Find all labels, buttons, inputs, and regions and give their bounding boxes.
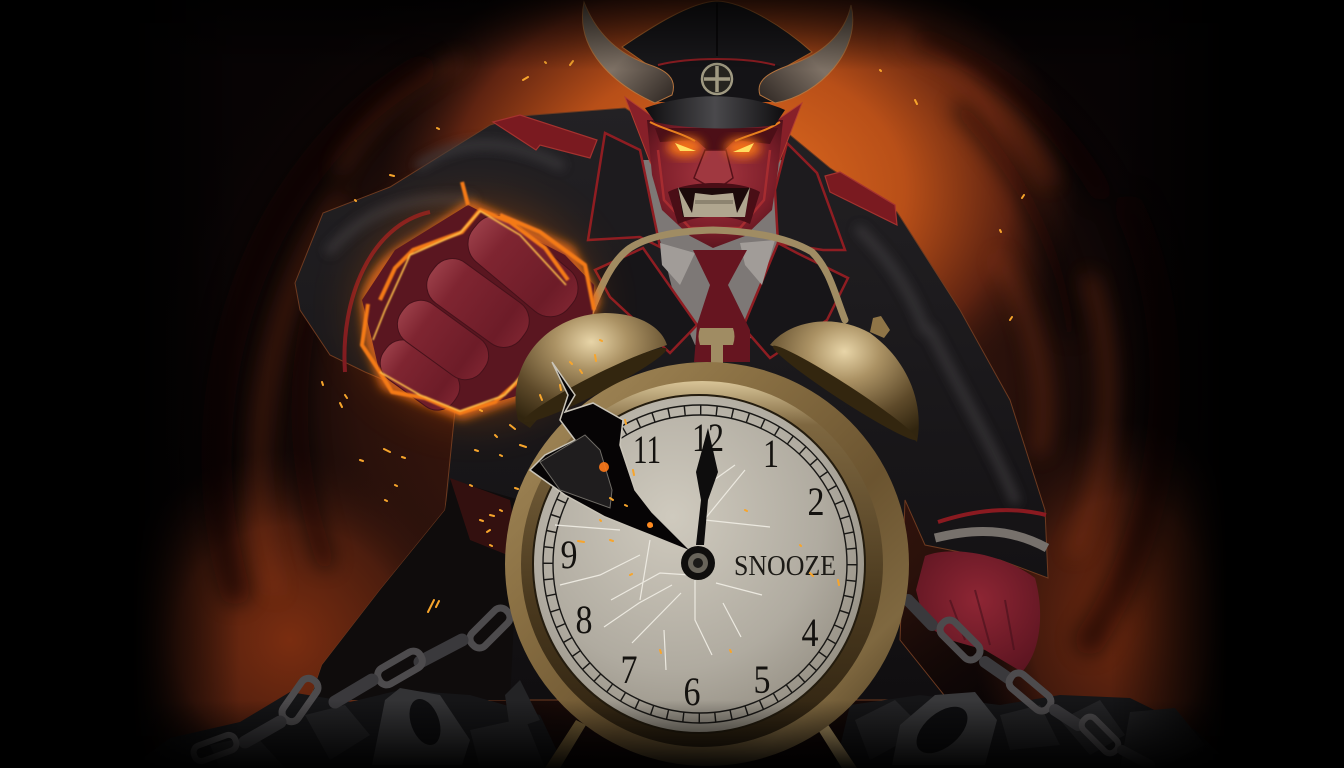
ears <box>625 97 802 190</box>
alarm clock body <box>505 362 909 766</box>
clock bell: left <box>516 313 670 429</box>
clock numerals: 7 <box>620 647 638 692</box>
demon body: black uniform jacket <box>295 108 1048 700</box>
shackle: right <box>892 692 997 765</box>
flaming fist <box>362 182 596 418</box>
chain: left <box>192 605 513 763</box>
clock numerals <box>560 415 824 714</box>
clock numerals: 1 <box>763 431 779 476</box>
glowing eyes <box>667 137 761 158</box>
horn: left <box>582 2 673 103</box>
clock numerals: 8 <box>576 597 592 642</box>
chain: right <box>908 600 1150 765</box>
broken shard <box>540 435 612 508</box>
sparks and embers <box>322 61 1024 653</box>
clock numerals: 5 <box>754 657 770 702</box>
alarm clock handle <box>588 230 845 320</box>
necktie <box>693 250 750 362</box>
cracks in the face <box>555 465 770 670</box>
clock numerals: 4 <box>802 610 818 655</box>
officer cap <box>622 1 812 128</box>
clock hands <box>696 428 718 545</box>
demon head <box>625 97 802 248</box>
bell finial <box>870 316 890 338</box>
clock hammer post <box>698 328 734 366</box>
demon hand: gripping chain <box>916 551 1040 672</box>
epaulette: right shoulder <box>825 172 897 225</box>
clock numerals: 11 <box>633 427 661 472</box>
cap badge <box>702 64 732 94</box>
clock face <box>533 395 865 733</box>
fiery brows <box>650 122 780 141</box>
clock numerals: 12 <box>692 415 724 460</box>
shirt <box>640 160 790 345</box>
clock numerals: 6 <box>684 669 700 714</box>
shirt collar <box>660 240 775 285</box>
snooze label: SNOOZE <box>734 551 836 582</box>
epaulette: left shoulder <box>493 115 597 158</box>
shattered crack <box>530 362 692 552</box>
lower lapels <box>595 243 848 358</box>
fist fingers <box>372 205 588 418</box>
shackle: left <box>372 688 470 765</box>
minute track <box>543 405 857 723</box>
cap visor <box>645 96 785 128</box>
snarling mouth with fangs <box>668 183 760 224</box>
upper lapels <box>588 133 845 250</box>
rubble pile <box>130 680 1235 768</box>
horn: right <box>759 5 853 103</box>
clock numerals: 9 <box>560 532 578 577</box>
clock bell: right <box>769 316 921 447</box>
flames around the fist <box>362 182 594 413</box>
clock numerals: 2 <box>808 479 824 524</box>
clock center hub <box>681 546 715 580</box>
clock feet <box>545 720 857 768</box>
nose <box>694 150 733 186</box>
